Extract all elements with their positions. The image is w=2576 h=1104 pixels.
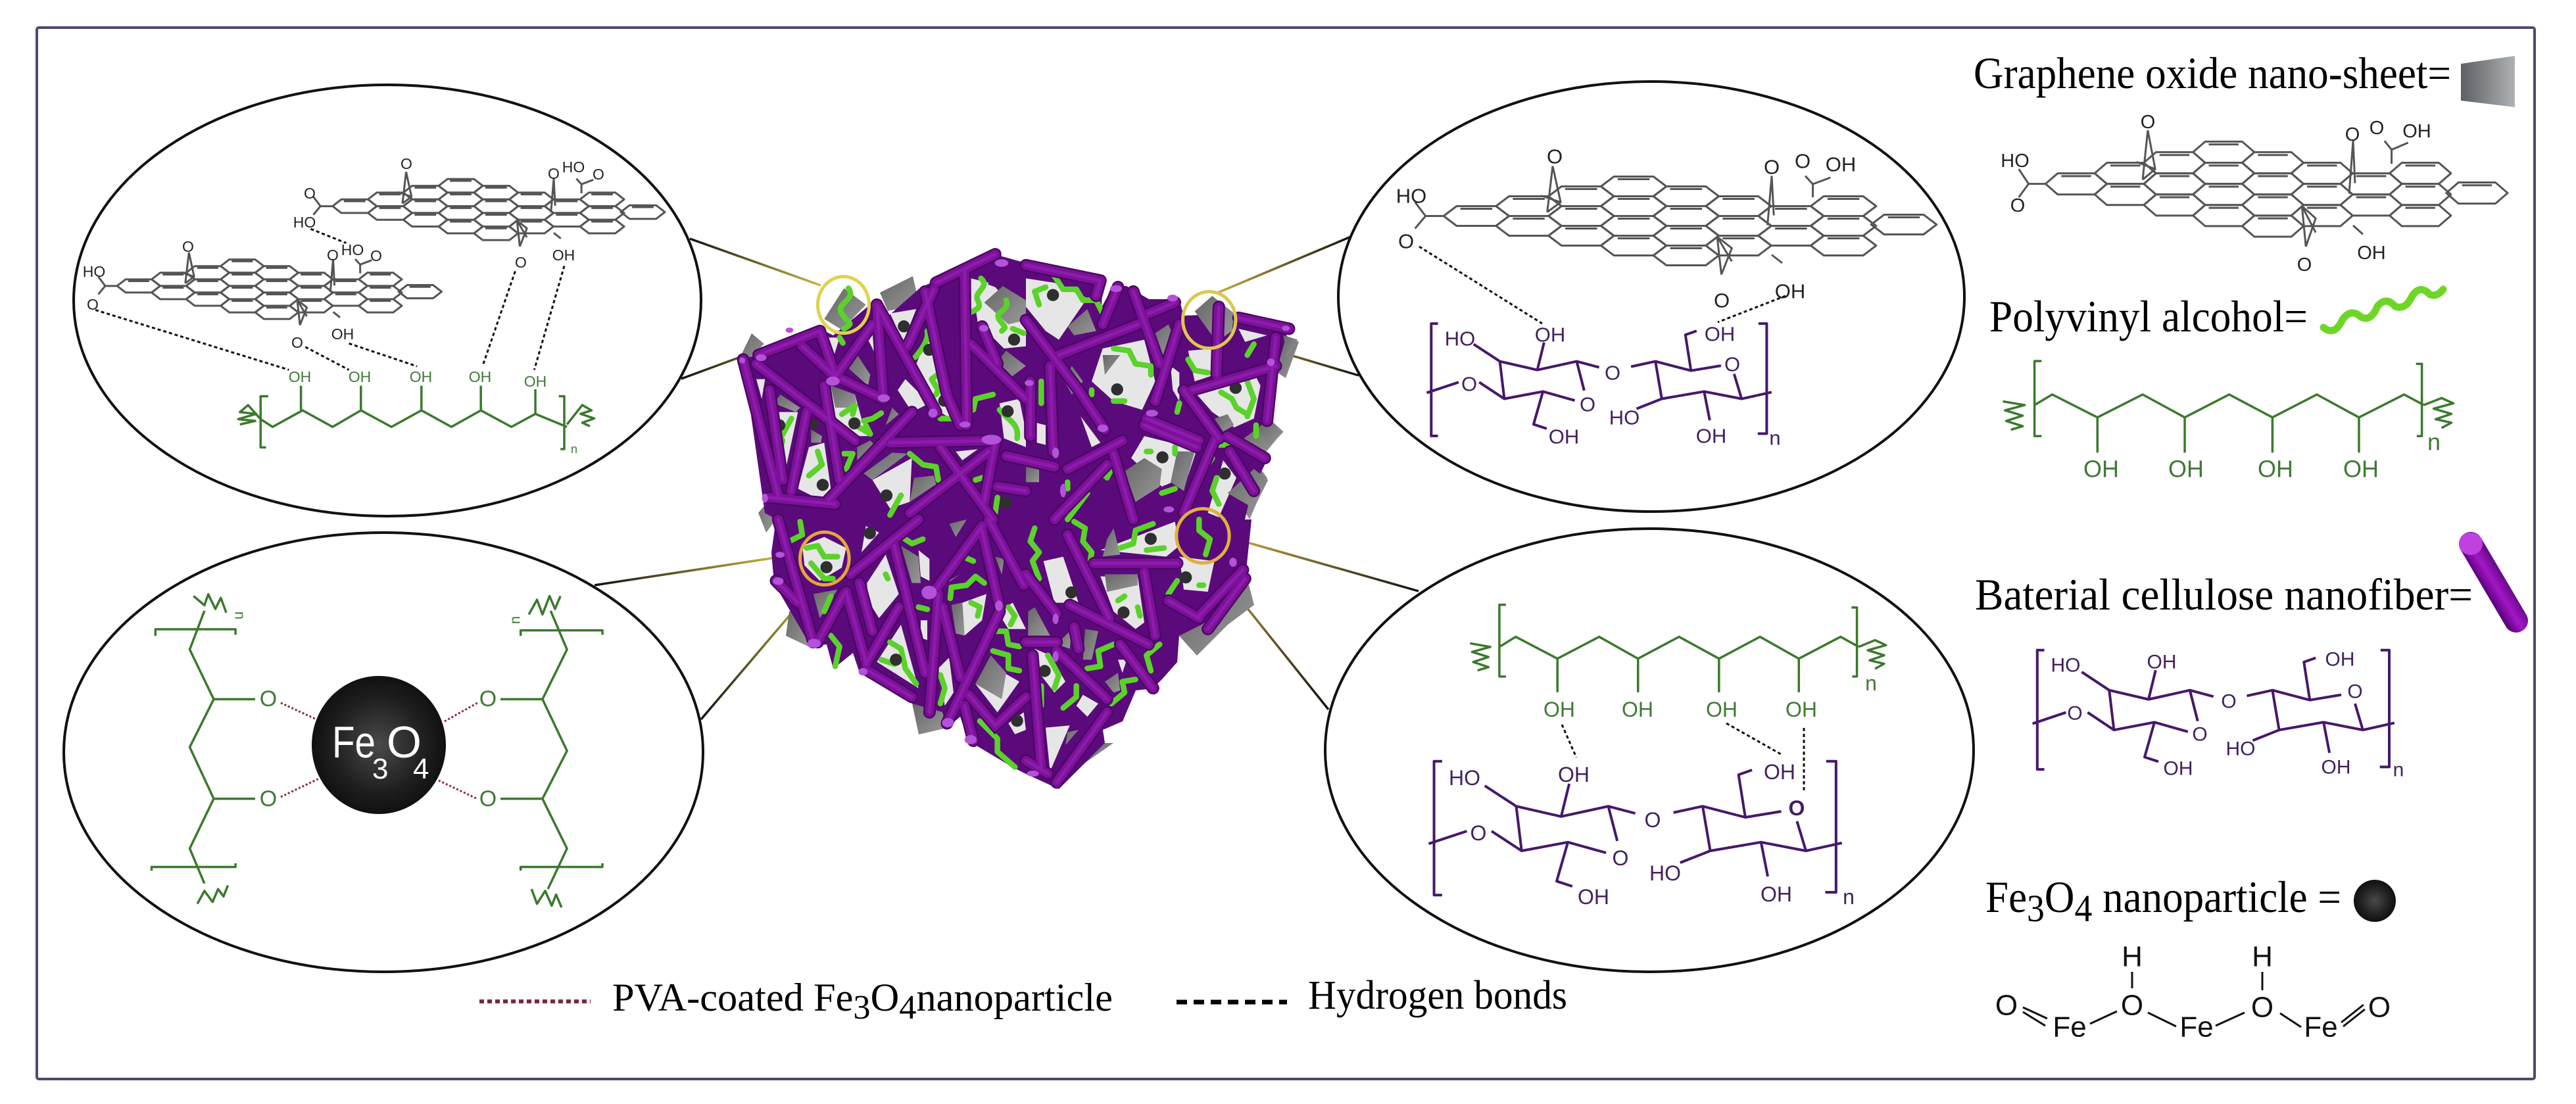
cellulose labels: OH — [1764, 760, 1795, 784]
cellulose labels: HO — [1445, 327, 1475, 350]
PVA labels: n — [1865, 671, 1877, 695]
key text: hydrogen bonds: Hydrogen bonds — [1308, 973, 1567, 1018]
structure labels: HO — [2051, 655, 2081, 676]
cellulose labels: HO — [1609, 406, 1640, 429]
cellulose labels: O — [1724, 352, 1740, 376]
structure labels: H — [2252, 940, 2273, 973]
structure labels: HO — [2001, 151, 2029, 172]
cellulose labels: O — [1470, 821, 1486, 845]
labels: HO — [83, 263, 105, 280]
structure labels: O — [2141, 112, 2155, 133]
cellulose labels: OH — [1761, 882, 1792, 906]
PVA oxygen labels: n — [506, 616, 523, 624]
structure labels: OH — [2343, 455, 2379, 483]
GO labels: O — [1795, 150, 1810, 172]
GO labels: O — [1547, 145, 1563, 168]
PVA labels: OH — [349, 368, 371, 385]
icon: black ball — [2354, 880, 2396, 922]
GO labels: O — [1398, 230, 1414, 252]
labels: O — [593, 166, 604, 183]
GO labels: OH — [1775, 280, 1805, 302]
graphene oxide sheet — [1415, 166, 1937, 275]
PVA labels: OH — [1622, 698, 1653, 721]
PVA chain — [1471, 605, 1886, 692]
GO labels: O — [1714, 289, 1730, 312]
structure labels: O — [2221, 690, 2237, 713]
heading: nanoparticle = — [2092, 872, 2341, 922]
structure labels: OH — [2083, 455, 2119, 483]
cellulose labels: OH — [1558, 763, 1590, 786]
cellulose chain — [1426, 324, 1772, 436]
structure labels: O — [2251, 992, 2273, 1023]
labels: O — [87, 296, 99, 313]
heading: O — [2045, 872, 2074, 922]
structure — [2019, 130, 2508, 247]
structure labels: OH — [2164, 757, 2193, 780]
PVA oxygen labels: O — [479, 686, 497, 711]
lower graphene oxide sheet — [99, 252, 442, 325]
labels — [83, 155, 604, 351]
PVA chains around nanoparticle — [151, 594, 602, 907]
PVA oxygen labels: n — [231, 612, 249, 619]
labels: HO — [341, 241, 364, 258]
labels: O — [291, 334, 303, 351]
structure labels: OH — [2147, 651, 2177, 673]
structure labels: Fe — [2053, 1011, 2087, 1043]
green PVA squiggles — [778, 276, 1256, 767]
GO labels: OH — [1826, 153, 1856, 176]
zoom circle: GO sheet bonded to cellulose — [1338, 82, 1964, 512]
cellulose labels: OH — [1578, 885, 1609, 909]
structure labels: n — [2393, 759, 2404, 781]
dotted red key line — [479, 999, 591, 1003]
zoom circle: GO sheets hydrogen bonded to PVA — [74, 85, 701, 516]
light sheet pockets — [756, 278, 1267, 771]
icon: sheet — [2461, 56, 2515, 107]
structure labels: O — [2067, 702, 2083, 725]
legend: polyvinyl alcohol — [1989, 289, 2453, 483]
PVA labels: OH — [1786, 698, 1817, 721]
structure labels: O — [2010, 195, 2025, 216]
PVA labels: OH — [1543, 698, 1575, 721]
cellulose labels — [1445, 322, 1781, 450]
PVA labels — [1543, 671, 1877, 721]
central composite cube — [738, 254, 1299, 789]
PVA labels: OH — [1706, 698, 1738, 721]
cellulose chain — [1428, 761, 1842, 895]
cellulose labels — [1449, 760, 1855, 909]
hydrogen bonds — [1562, 723, 1804, 792]
heading: Polyvinyl alcohol= — [1989, 291, 2308, 341]
heading: 3 — [2027, 887, 2045, 930]
hydrogen bonds — [1419, 247, 1786, 324]
key text: PVA-coated: nanoparticle — [916, 976, 1113, 1019]
Fe3O4 label: 4 — [413, 753, 429, 785]
icon: purple rod — [2459, 533, 2516, 621]
labels: O — [401, 155, 412, 172]
key text: PVA-coated: 4 — [899, 989, 916, 1026]
cellulose labels: n — [1843, 885, 1855, 909]
labels: OH — [331, 325, 354, 343]
structure labels: O — [2192, 723, 2208, 746]
structure labels: Fe — [2304, 1011, 2338, 1043]
fiber bodies — [743, 254, 1289, 782]
icon: green squiggle — [2323, 289, 2443, 331]
structure labels: HO — [2225, 738, 2256, 760]
Fe3O4 label: Fe — [332, 717, 376, 767]
key text: PVA-coated: PVA-coated Fe — [612, 976, 852, 1019]
cellulose labels: OH — [1696, 425, 1726, 447]
Fe3O4 nanoparticle — [312, 676, 446, 814]
cellulose labels: OH — [1535, 324, 1565, 346]
structure labels: n — [2427, 429, 2441, 455]
structure labels: O — [2297, 254, 2312, 276]
structure labels: OH — [2325, 648, 2354, 671]
PVA oxygen labels: O — [479, 786, 497, 811]
structure labels: OH — [2402, 121, 2431, 142]
structure — [2004, 361, 2453, 452]
GO labels: O — [1764, 155, 1780, 179]
zoom circle: Fe3O4 with PVA chains — [64, 533, 703, 972]
heading: Fe — [1985, 872, 2030, 922]
labels: OH — [552, 247, 575, 264]
structure labels: O — [2347, 681, 2363, 702]
PVA-coated dotted links — [281, 703, 477, 799]
heading: 4 — [2074, 887, 2092, 930]
cellulose labels: O — [1580, 393, 1595, 416]
structure labels — [1995, 940, 2391, 1043]
PVA labels: n — [571, 443, 577, 456]
upper graphene oxide sheet — [313, 172, 665, 247]
PVA labels: OH — [524, 373, 547, 390]
labels: O — [515, 254, 527, 271]
cellulose labels: O — [1789, 796, 1805, 820]
GO labels: HO — [1396, 184, 1426, 208]
PVA oxygen labels — [231, 612, 523, 811]
structure labels — [2001, 112, 2431, 276]
bottom key — [479, 973, 1567, 1026]
structure labels: O — [2369, 118, 2384, 139]
cellulose labels: n — [1769, 426, 1781, 450]
PVA oxygen labels: O — [260, 786, 277, 811]
heading: Graphene oxide nano-sheet= — [1974, 48, 2451, 98]
legend: Fe3O4 nanoparticle — [1985, 872, 2396, 1043]
labels: HO — [293, 214, 316, 231]
hydrogen bonds — [95, 229, 564, 370]
structure labels — [2051, 648, 2404, 781]
cellulose labels: OH — [1549, 425, 1579, 448]
fiber shadows — [743, 254, 1289, 782]
zoom circle: PVA bonded to cellulose — [1325, 529, 1974, 972]
Fe3O4 dots — [773, 289, 1242, 727]
structure labels: O — [2368, 992, 2391, 1023]
protruding gray sheets behind the cube — [738, 276, 1299, 769]
heading: Baterial cellulose nanofiber= — [1975, 569, 2473, 619]
labels: O — [370, 247, 382, 264]
cellulose labels: O — [1461, 372, 1477, 396]
GO labels — [1396, 145, 1856, 312]
cellulose labels: OH — [1705, 322, 1735, 346]
Fe3O4 label: O — [387, 717, 422, 767]
structure labels: O — [1995, 989, 2018, 1022]
labels: HO — [562, 158, 585, 176]
legend: bacterial cellulose nanofiber — [1975, 533, 2516, 781]
structure labels: OH — [2168, 455, 2204, 483]
gray graphene sheets — [774, 286, 1298, 745]
structure — [2033, 650, 2394, 769]
Fe3O4 label: 3 — [372, 753, 388, 785]
fiber ends — [739, 259, 1290, 777]
key text: PVA-coated: 3 — [853, 989, 871, 1026]
yellow highlight circles — [800, 277, 1236, 585]
PVA labels: OH — [410, 368, 432, 385]
labels: O — [327, 247, 339, 264]
key text: PVA-coated: O — [871, 976, 899, 1019]
cellulose labels: HO — [1449, 766, 1480, 790]
cube body silhouette — [743, 254, 1289, 789]
labels: O — [304, 185, 316, 202]
labels: O — [182, 238, 194, 255]
structure labels: OH — [2357, 243, 2386, 264]
cellulose labels: HO — [1649, 861, 1681, 885]
PVA labels: OH — [469, 368, 491, 385]
PVA oxygen labels: O — [260, 686, 277, 711]
fiber highlights — [743, 254, 1289, 782]
connector lines from zoom circles to cube — [595, 237, 1419, 719]
structure labels: Fe — [2179, 1011, 2214, 1043]
dashed black key line — [1177, 999, 1287, 1005]
cellulose labels: O — [1605, 362, 1620, 384]
structure labels: OH — [2321, 756, 2350, 779]
cellulose labels: O — [1645, 808, 1661, 832]
structure labels: H — [2122, 940, 2143, 973]
structure labels: O — [2345, 124, 2360, 145]
labels: O — [548, 165, 560, 182]
PVA labels: OH — [289, 368, 311, 385]
legend: graphene oxide — [1974, 48, 2515, 276]
PVA labels — [289, 368, 577, 456]
structure labels — [2083, 429, 2441, 483]
structure labels: O — [2121, 989, 2143, 1022]
cellulose labels: O — [1613, 846, 1628, 870]
structure bonds — [2023, 972, 2365, 1027]
structure labels: OH — [2258, 455, 2293, 483]
PVA chain — [238, 386, 595, 449]
